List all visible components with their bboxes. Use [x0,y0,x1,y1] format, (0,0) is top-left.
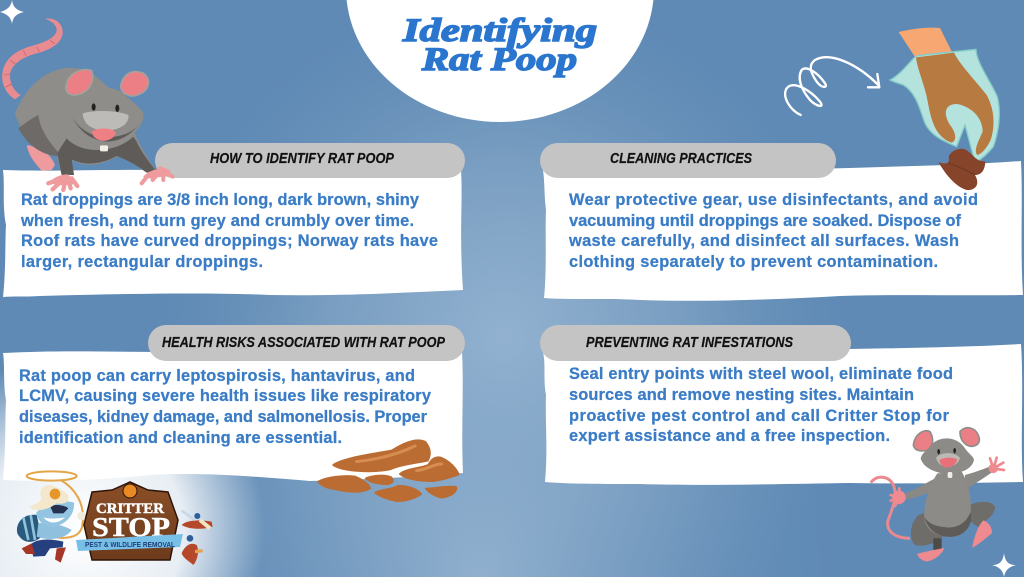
raccoon body [37,523,72,539]
raccoon boots [22,543,66,563]
body text: expert assistance and a free inspection. [569,427,890,445]
rat ears [66,70,93,95]
raccoon tail [17,515,42,542]
sleeve [899,28,953,58]
body text: Seal entry points with steel wool, eliminate food [569,365,953,383]
body text [569,365,953,445]
panel background [543,344,1023,485]
title text: Rat Poop [421,42,577,78]
heading pill [540,143,836,178]
body text: clothing separately to prevent contamination. [569,253,938,271]
wooden sign [84,482,178,560]
logo ribbon: PEST & WILDLIFE REMOVAL [85,542,176,549]
icon: rat droppings pile [318,440,459,501]
body text: waste carefully, and disinfect all surfaces. Wash [568,232,959,250]
rat tail [871,477,910,538]
rat arms [905,478,938,499]
raccoon hat [29,485,69,510]
body text: LCMV, causing severe health issues like respiratory [19,387,432,405]
hand [916,53,994,155]
star badge [123,484,137,498]
heading: HOW TO IDENTIFY RAT POOP [210,151,394,167]
title text [402,13,597,78]
panel: how to identify [3,143,465,297]
heading pill [155,143,465,178]
panel: preventing infestations [540,325,1023,485]
body text: Rat droppings are 3/8 inch long, dark brown, shiny [21,191,420,209]
rat body [15,68,157,175]
body text: proactive pest control and call Critter Stop for [569,407,950,425]
rat tooth [948,472,952,478]
rat legs [911,502,995,546]
raccoon head [36,501,74,527]
panel background [543,161,1023,301]
heading pill [148,325,465,361]
body text: Rat poop can carry leptospirosis, hantavirus, and [19,367,415,385]
icon: gloved hand holding droppings [785,28,999,190]
logo text: STOP [92,512,170,542]
logo text [92,501,170,542]
body text: Wear protective gear, use disinfectants, and avoid [569,191,978,209]
rat shadows [18,115,61,156]
heading: CLEANING PRACTICES [610,151,752,167]
rat tail [2,18,63,99]
rat eyes [937,449,940,454]
rat head [921,438,974,474]
glove [890,49,999,163]
swirl arrow [785,57,879,115]
sparkle bottom right [992,553,1016,577]
body text [568,191,978,271]
body text: Roof rats have curved droppings; Norway rats have [21,232,438,250]
title [346,0,654,122]
body text: identification and cleaning are essential. [19,429,342,447]
raccoon legs [30,539,63,557]
logo text: CRITTER [96,501,164,517]
icon: crouching rat [2,18,173,190]
rat teeth [100,145,108,151]
body text [19,367,432,447]
logo: Critter Stop [17,471,213,565]
body text: diseases, kidney damage, and salmonellosis. Proper [19,408,428,426]
icon: dancing rat [871,428,1004,561]
rat back foot [27,145,55,171]
panel background [3,170,463,297]
panel background [3,351,463,481]
panel: cleaning practices [540,143,1023,301]
sparkle top left [0,0,24,24]
body text: vacuuming until droppings are soaked. Dispose of [569,212,962,230]
rat front feet [48,168,173,190]
body text: larger, rectangular droppings. [21,253,263,271]
panel: health risks [3,325,465,481]
rat nose [92,129,116,141]
droppings held [938,149,985,190]
title text: Identifying [402,13,597,49]
body text [20,191,438,271]
body text: sources and remove nesting sites. Maintain [569,386,914,404]
logo glow [0,340,280,577]
rat head [70,88,143,142]
heading: PREVENTING RAT INFESTATIONS [586,335,793,351]
title background circle [346,0,654,122]
lasso [27,471,83,538]
heading: HEALTH RISKS ASSOCIATED WITH RAT POOP [162,335,445,351]
body text: when fresh, and turn grey and crumbly over time. [20,212,414,230]
logo ribbon [76,534,183,551]
heading pill [540,325,851,361]
raccoon hand [77,512,86,520]
rat nose [939,458,957,468]
raccoon mascot and lasso [17,471,86,563]
rat eyes [92,103,96,111]
rat body [924,472,971,537]
rat paws [891,458,1004,561]
rat ears [913,431,933,451]
insect mascots [182,511,213,565]
